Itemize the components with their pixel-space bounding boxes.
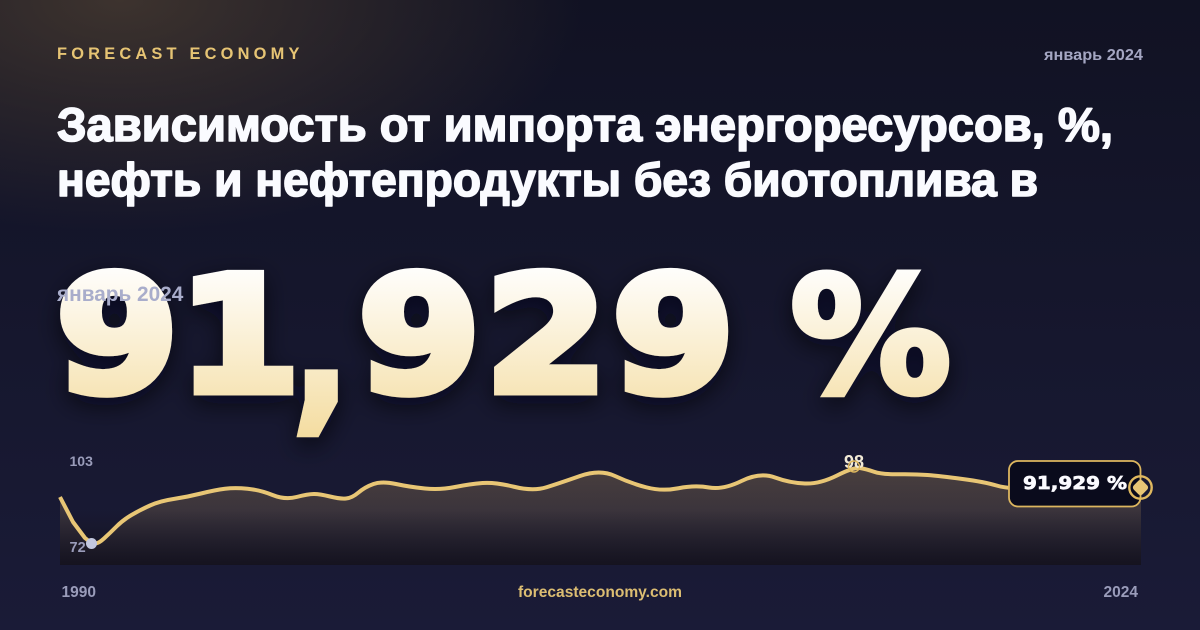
area fade xyxy=(60,510,1141,565)
max axis label: 103 xyxy=(70,453,93,469)
big value: % xyxy=(790,243,951,430)
source url: forecasteconomy.com xyxy=(518,584,682,601)
title xyxy=(57,98,1113,206)
end year: 2024 xyxy=(1104,584,1138,601)
peak label: 98 xyxy=(844,452,864,472)
chart xyxy=(60,452,1152,565)
date label top right: январь 2024 xyxy=(1044,47,1143,64)
brand label: FORECAST ECONOMY xyxy=(57,45,304,63)
date label over big value: январь 2024 xyxy=(56,283,184,306)
title line 2: нефть и нефтепродукты без биотоплива в xyxy=(57,153,1038,206)
title line 1: Зависимость от импорта энергоресурсов, %, xyxy=(57,98,1113,151)
value callout: 91,929 % xyxy=(1023,473,1127,494)
area fill xyxy=(60,468,1141,565)
minimum marker xyxy=(86,538,97,549)
big value: 91 xyxy=(56,243,300,429)
big value: , xyxy=(294,243,349,450)
line xyxy=(60,468,1141,544)
current value marker xyxy=(1129,476,1152,499)
big value xyxy=(56,243,951,450)
start year: 1990 xyxy=(62,584,96,601)
peak marker xyxy=(848,461,860,472)
value callout xyxy=(1009,461,1140,506)
min axis label: 72 xyxy=(70,540,86,556)
big value: 929 xyxy=(358,243,735,429)
